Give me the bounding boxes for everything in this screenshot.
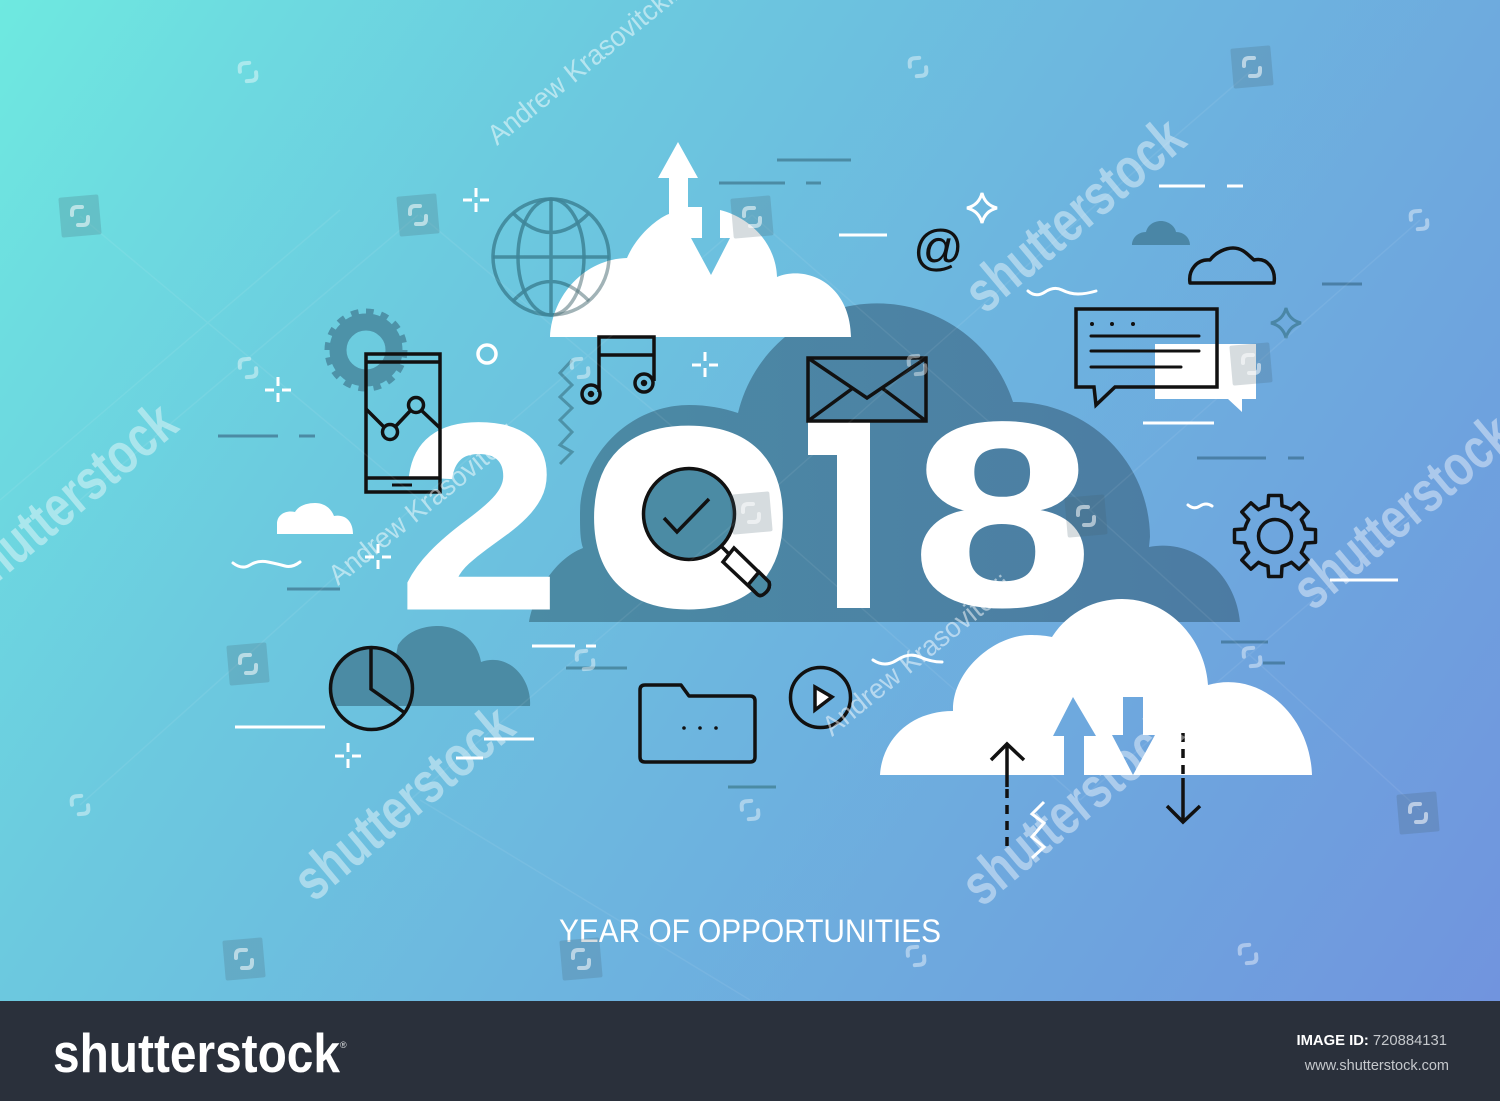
white chat bubble	[1155, 344, 1256, 412]
year 2018	[407, 421, 1084, 610]
icon: music notes	[582, 337, 654, 403]
watermarks: Andrew Krasovitckii	[322, 419, 524, 591]
registered mark: ®	[340, 1040, 347, 1050]
white zigzag	[1032, 802, 1044, 858]
white dashes	[235, 186, 1398, 758]
digit 2: 2	[399, 369, 560, 664]
footer logo: shutterstock	[53, 1022, 340, 1084]
bottom white cloud with upload and download arrows	[880, 599, 1312, 775]
icon: folder	[640, 685, 755, 762]
teal gear	[328, 312, 404, 388]
footer bar	[0, 1001, 1500, 1101]
icon: globe	[493, 199, 609, 315]
white wavy lines	[233, 288, 1212, 664]
outlined gear	[1234, 496, 1316, 576]
icon: phone with line chart	[366, 354, 440, 492]
small teal cloud	[1132, 221, 1190, 245]
small white cloud	[277, 503, 353, 534]
watermarks: shutterstock	[952, 104, 1198, 325]
top white cloud with arrows	[550, 142, 851, 337]
digit 8: 8	[912, 368, 1093, 661]
digit 1: 1	[794, 305, 911, 685]
icon: magnifier with check mark	[633, 444, 769, 596]
thin download arrow	[1167, 733, 1200, 822]
teal dashes	[218, 160, 1362, 787]
teal four-point star	[1271, 308, 1301, 338]
teal zigzag	[560, 360, 572, 464]
globe overlap on the cloud	[554, 260, 611, 317]
outlined chat bubble with text lines	[1076, 309, 1217, 405]
icon: envelope	[808, 358, 926, 421]
large teal cloud behind the year	[529, 303, 1240, 622]
website: www.shutterstock.com	[1304, 1058, 1449, 1074]
digit 1	[808, 422, 870, 608]
white four-point star	[967, 193, 997, 223]
digit 0: 0	[579, 381, 798, 664]
white plus sparkles	[265, 188, 718, 768]
icon: at sign: @	[913, 220, 964, 276]
watermarks: shutterstock	[949, 697, 1195, 918]
outlined cloud	[1190, 248, 1274, 283]
icon: play button	[790, 668, 850, 728]
image id: IMAGE ID: 720884131	[1296, 1033, 1447, 1049]
watermarks: shutterstock	[281, 692, 527, 913]
white ring	[478, 345, 496, 363]
teal cloud behind pie chart	[329, 626, 530, 706]
title: YEAR OF OPPORTUNITIES	[559, 913, 941, 949]
icon: pie chart	[330, 648, 412, 730]
thin upload arrow	[991, 744, 1024, 848]
watermarks: Andrew Krasovitckii	[816, 570, 1018, 742]
